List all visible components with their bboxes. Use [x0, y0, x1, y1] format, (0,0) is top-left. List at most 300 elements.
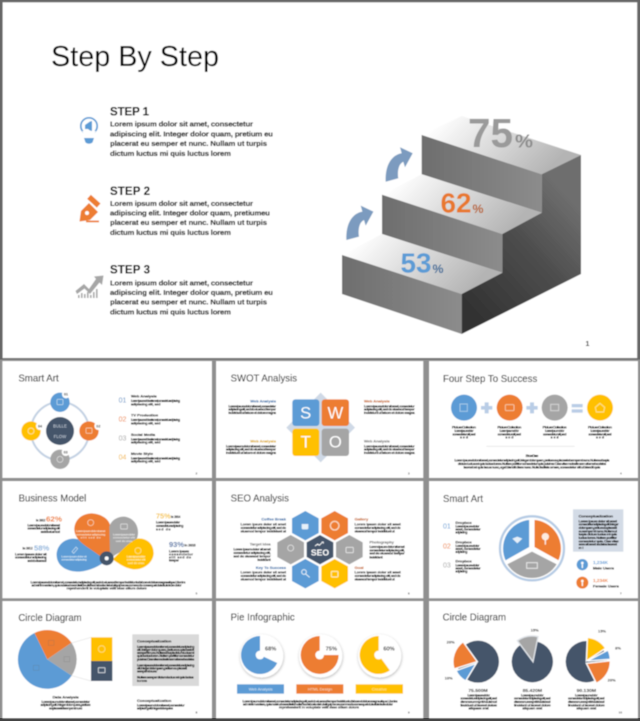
pie: 90.130M: 15% — [598, 628, 606, 633]
list of four items: Web Analysis — [131, 394, 157, 399]
conceptualization box: mi — [579, 546, 583, 550]
panel: main slide Step By Step — [2, 2, 637, 358]
caption: 85.420M: consectetur adipiscing elit, sed — [514, 697, 551, 701]
petal diagram: sed do eius — [116, 539, 133, 543]
captions: consectetur elit, sed — [588, 432, 612, 436]
title: SEO Analysis — [231, 493, 289, 504]
hexagon cluster: SEO — [311, 547, 329, 557]
conceptualization box: consectetur adipiscing elit. Integer — [579, 523, 619, 527]
text: Coffee Break — [241, 517, 287, 533]
numbered list: amet, consectetur — [455, 547, 481, 551]
text: Gallery: eiusmod tempor incididunt ut — [355, 529, 395, 533]
slide background — [2, 361, 212, 478]
stat: 93% in 2015 — [169, 540, 196, 562]
text: Target Idea: Target Idea — [250, 542, 271, 547]
captions: Picture Collection — [543, 424, 567, 429]
caption: Conceptualization: Lorem ipsum dolor sit amet, consectetur — [137, 703, 185, 707]
numbered list: amet, consectetur — [455, 528, 481, 532]
icon: light bulb — [81, 118, 97, 144]
numbered list: Lorem ipsum dolor — [455, 525, 480, 529]
conceptualization box: semper et nunc. Nullam ut turpis dictum luctus mi — [137, 651, 194, 655]
text: Photography: consectetur adipiscing elit, — [369, 548, 405, 552]
numbered list: adipiscing — [455, 531, 467, 535]
stat: 93% in 2015: consectetur — [169, 552, 194, 556]
chart: 3D staircase — [342, 116, 581, 334]
title: Four Step To Success — [443, 374, 537, 385]
pie: 75.500M — [445, 640, 499, 683]
description text: reprehenderit in voluptate velit esse cillum dolore — [67, 587, 147, 591]
cycle diagram: FLOW — [54, 434, 67, 439]
pie: 90.130M — [566, 628, 621, 683]
caption: 75.500M — [460, 688, 497, 711]
text block: opportunities: Lorem ipsum dolor sit amet, consectetur — [364, 444, 415, 448]
text: Gallery: Gallery — [355, 517, 369, 522]
list of four items: TV Production — [131, 413, 159, 418]
middle step — [382, 174, 542, 234]
text: Target Idea: incididunt — [257, 558, 271, 562]
text: Gallery: consectetur adipiscing elit, sed do — [355, 526, 401, 530]
cycle diagram: 01 — [64, 393, 68, 397]
captions: sed — [596, 436, 604, 440]
conceptualization box: sem sit amet sodales laoreet — [579, 543, 618, 547]
panel: Circle Diagram pie with boxes — [2, 601, 212, 718]
label: 62%: 62 — [440, 188, 472, 218]
arrow: upper curved arrow — [386, 147, 413, 182]
panel: SEO Analysis — [216, 481, 423, 598]
captions: sed — [551, 436, 559, 440]
pie chart — [18, 630, 77, 689]
caption: 90.130M: aliquam erat — [576, 707, 597, 711]
equation of four circles — [451, 395, 613, 421]
pie: 75%: 75% — [326, 647, 337, 653]
list of four items: 03 — [119, 436, 127, 443]
numbered list: Lorem ipsum dolor — [455, 563, 480, 567]
pie: 60%: 60% — [383, 647, 395, 653]
caption: 85.420M — [514, 688, 551, 711]
conceptualization box: quis luctus lorem. Nullam porttitor consectetur — [137, 654, 195, 658]
stat: 58% in 2012: In 2012 — [23, 546, 33, 551]
pie: 90.130M: 8% — [615, 646, 621, 651]
panel: Pie Infographic — [216, 601, 423, 718]
numbered list: 03 — [443, 563, 451, 570]
numbered list: adipiscing — [455, 550, 467, 554]
dark side of staircase — [462, 155, 581, 334]
panel: Four Step To Success — [429, 361, 638, 478]
label: 75%: % — [515, 132, 533, 152]
caption: 90.130M: Lorem ipsum dolor — [575, 693, 598, 697]
text block: opportunities: incididunt ut labore et dolore magna — [364, 451, 415, 455]
text block: step 2: Lorem ipsum dolor sit amet, consectetur — [110, 199, 253, 208]
caption: 85.420M: aliquam erat — [522, 707, 543, 711]
text block: step 1: STEP 1 — [110, 106, 150, 118]
stat: 58% in 2012 — [15, 543, 50, 563]
petal diagram: Lorem ipsum dolor — [113, 532, 136, 536]
stat: female users: 1,234K — [593, 578, 609, 583]
text: Coffee Break: eiusmod tempor incididunt ut — [241, 529, 287, 533]
caption: 85.420M: Lorem ipsum dolor — [521, 693, 544, 697]
page number: 5 — [196, 592, 198, 596]
petal diagram: consectetur elit — [113, 536, 135, 540]
text: Goal: eiusmod tempor incididunt ut — [355, 577, 395, 581]
label: 62%: % — [472, 202, 484, 216]
numbered list — [443, 520, 481, 573]
text block: weaknesses: adipiscing elit, sed do eiusmod tempor — [364, 408, 415, 412]
text block: strengths: incididunt ut labore et dolore magna — [228, 411, 276, 415]
pie: 85.420M: 15% — [531, 627, 539, 632]
stat: 62% in 2012: In 2012 — [36, 517, 46, 522]
caption: 90.130M — [568, 688, 605, 711]
caption: 90.130M: consectetur adipiscing elit, sed — [568, 697, 605, 701]
stat: female users: Female Users — [593, 584, 620, 589]
caption: Conceptualization: Conceptualization — [137, 698, 172, 703]
label: Web Analysis: Web Analysis — [249, 687, 273, 692]
text block: step 3 — [110, 264, 273, 316]
list of four items — [119, 394, 180, 464]
hexagon cluster — [277, 511, 363, 588]
captions: Lorem ipsum dolor — [545, 429, 565, 433]
pie: 68%: 68% — [265, 647, 276, 653]
numbered list: Dropbox — [455, 539, 472, 544]
title: Circle Diagram — [18, 613, 82, 624]
pie: 60% — [358, 634, 401, 678]
text block: threats: Lorem ipsum dolor sit amet, consectetur — [226, 444, 277, 448]
stat: 93% in 2015: elit sed do — [169, 555, 191, 559]
petal diagram: elit sed do — [81, 536, 101, 540]
stat: 93% in 2015: tempor — [169, 558, 180, 562]
text: Target Idea — [233, 542, 271, 562]
list of four items: adipiscing elit, sed — [131, 441, 160, 445]
title: Step By Step — [51, 41, 219, 73]
text block: step 2: STEP 2 — [110, 186, 150, 198]
slide background — [216, 481, 423, 598]
pie: 90.130M: 20% — [608, 677, 616, 682]
captions — [452, 424, 613, 440]
text block: weaknesses: Web Analysis — [364, 399, 390, 404]
caption: 75.500M: tincidunt ut laoreet dolore — [460, 703, 497, 707]
slide background — [2, 601, 212, 718]
page number: 3 — [408, 472, 410, 476]
text block: step 3: STEP 3 — [110, 264, 150, 276]
petal diagram: Lorem ipsum dolor — [127, 554, 146, 558]
page number: 4 — [620, 472, 622, 476]
description text — [31, 581, 185, 591]
stat: 58% in 2012: sed do eiusmod — [27, 559, 47, 563]
title: Business Model — [19, 494, 86, 505]
captions: sed — [505, 436, 513, 440]
divider line — [486, 445, 575, 447]
caption: 75.500M: consectetur adipiscing elit, sed — [460, 697, 497, 701]
text: Goal: Goal — [355, 565, 364, 570]
text: Photography: Photography — [369, 539, 395, 544]
bottom frame edge — [0, 718, 640, 721]
conceptualization box: Conceptualization — [137, 638, 172, 643]
stat: male users: Male Users — [593, 565, 615, 570]
list of four items: Lorem ipsum dolor sit amet, consectetur adipiscing — [131, 437, 180, 441]
label: Creative — [356, 684, 403, 694]
conceptualization box: Lorem ipsum dolor sit amet, consectetur adipiscing — [137, 645, 194, 649]
conceptualization box: luctus lorem. Nullam porttitor — [579, 536, 618, 540]
caption: 75.500M: 75.500M — [468, 688, 488, 694]
connector lines — [71, 637, 91, 681]
text block: step 2: placerat eu semper et nunc. Nullam ut turpis — [110, 218, 267, 227]
SWOT diagram: T — [301, 433, 311, 452]
stat: 62% in 2012: 62% — [46, 515, 62, 524]
text block: strengths: Lorem ipsum dolor sit amet, consectetur — [228, 404, 277, 408]
top step — [422, 116, 581, 174]
numbered list: 02 — [443, 543, 451, 550]
navy box with icon — [91, 661, 112, 681]
description text: reprehenderit in voluptate velit esse cillum dolore — [279, 706, 359, 710]
description text: ad minim veniam, quis nostrud exercitation ullamco laboris nisi ut aliquip ex ea commodo consequat duis aute irure dolor — [32, 584, 182, 588]
stat: male users — [577, 559, 615, 570]
captions: consectetur elit, sed — [498, 432, 521, 436]
text: Coffee Break: Lorem ipsum dolor sit amet — [241, 523, 287, 527]
description text — [242, 699, 397, 710]
text block: threats: incididunt ut labore et dolore magna — [226, 451, 276, 455]
title: Smart Art — [443, 494, 483, 505]
caption: Conceptualization — [137, 698, 185, 711]
text: Photography: Lorem ipsum dolor sit amet — [369, 545, 405, 549]
text block: threats: Web Analysis — [250, 439, 277, 444]
text: Photography — [369, 539, 405, 559]
page number: 2 — [196, 472, 198, 476]
text: Gallery — [355, 517, 401, 533]
stat: 62% in 2012: Lorem ipsum dolor sit amet — [27, 523, 61, 527]
stat: 58% in 2012: consectetur adipiscing — [15, 556, 47, 560]
arrow: lower curved arrow — [346, 206, 373, 240]
bottom riser — [342, 255, 462, 334]
bottom step — [342, 234, 502, 294]
text block: weaknesses: Lorem ipsum dolor sit amet, consectetur — [364, 404, 415, 408]
caption: Data Analysis: Lorem ipsum dolor sit amet, consectetur — [41, 700, 90, 704]
captions: Picture Collection — [452, 424, 477, 429]
text block: step 1: dictum luctus mi quis luctus lorem — [110, 149, 231, 158]
slide background — [429, 361, 638, 478]
numbered list: Dropbox — [455, 559, 472, 564]
page number: 8 — [196, 711, 198, 715]
caption: 75.500M: Lorem ipsum dolor — [467, 693, 491, 697]
list of four items: 04 — [119, 455, 127, 462]
text: Photography: sed do eiusmod tempor — [369, 552, 405, 556]
caption: 90.130M: 90.130M — [577, 688, 596, 694]
list of four items: Movie Style — [131, 451, 154, 456]
main slide background — [2, 2, 637, 358]
text block: step 2 — [110, 186, 270, 237]
conceptualization box: Conceptualization — [579, 513, 614, 518]
text: Key To Success: eiusmod tempor incididunt ut — [241, 577, 287, 581]
stat: 75% in 2014: consectetur adipiscing — [156, 524, 183, 528]
caption: Data Analysis: Data Analysis — [53, 695, 79, 700]
SWOT diagram — [286, 393, 355, 462]
page number: 9 — [408, 711, 410, 715]
main slide frame — [0, 0, 640, 360]
show case text: Show Case — [526, 453, 539, 458]
text block: step 2: adipiscing elit. Integer dolor quam, pretiumeu — [110, 208, 270, 218]
yellow box with icon — [91, 637, 112, 661]
captions: Lorem ipsum dolor — [590, 429, 610, 433]
caption: Data Analysis: adipiscing elit. Integer dolor quam, pretium — [41, 703, 91, 707]
stat: female users — [576, 577, 620, 589]
caption: 75.500M: diam nonummy nibh euismod — [460, 700, 497, 704]
numbered list: 01 — [443, 524, 451, 531]
text block: step 3: Lorem ipsum dolor sit amet, consectetur — [110, 278, 253, 287]
text: Coffee Break: consectetur adipiscing elit, sed do — [241, 526, 286, 530]
icon: rising chart arrow — [76, 276, 104, 298]
title: Smart Art — [18, 373, 59, 384]
slide background — [216, 361, 423, 478]
text: Gallery: Lorem ipsum dolor sit amet — [355, 523, 401, 527]
description text: ad minim veniam, quis nostrud exercitation ullamco laboris nisi ut aliquip ex ea commodo consequat duis aute irure dolor — [243, 702, 394, 706]
caption: Conceptualization: adipiscing elit. Integer dolor quam — [137, 707, 173, 711]
label: 75%: 75 — [468, 110, 513, 156]
text: Coffee Break: Coffee Break — [261, 517, 287, 522]
petal diagram — [57, 513, 154, 572]
label: 53%: % — [432, 262, 444, 276]
text: Photography: incididunt — [369, 555, 383, 559]
title: SWOT Analysis — [231, 373, 297, 384]
list of four items: Lorem ipsum dolor sit amet, consectetur adipiscing — [131, 456, 180, 460]
text block: threats: adipiscing elit, sed do eiusmod tempor — [226, 448, 277, 452]
show case text: Lorem ipsum dolor sit amet, consectetur adipiscing elit. Integer dolor quam, pretium eu placerat et semper et nunc. Nullam ut turpis — [454, 459, 610, 463]
numbered list: adipiscing — [455, 569, 467, 573]
stat: 58% in 2012: 58% — [34, 543, 50, 552]
conceptualization box — [132, 634, 199, 686]
SWOT diagram: W — [327, 403, 343, 422]
page number: 10 — [619, 710, 622, 714]
text block: step 3: dictum luctus mi quis luctus lorem — [110, 307, 231, 316]
conceptualization box: semper et nunc — [137, 670, 157, 674]
captions: sed — [460, 436, 468, 440]
text block: weaknesses: incididunt ut labore et dolore magna — [364, 411, 415, 415]
text: Key To Success — [241, 565, 287, 581]
show case text — [454, 453, 610, 469]
pie: 75% — [299, 634, 342, 678]
text block: threats — [226, 439, 277, 455]
numbered list: Lorem ipsum dolor — [455, 544, 480, 548]
stat: 75% in 2014: In 2014 — [171, 514, 181, 519]
petal diagram: sed do eius — [128, 561, 145, 565]
list of four items: 02 — [119, 417, 127, 424]
cycle diagram — [21, 390, 102, 469]
text: Target Idea: consectetur adipiscing elit, — [233, 551, 271, 555]
slide background — [216, 601, 423, 718]
page number: 7 — [620, 592, 622, 596]
text block: opportunities — [364, 439, 415, 455]
list of four items: Social Media — [131, 432, 156, 437]
label: Web Analysis — [237, 684, 284, 694]
stat: male users: 1,234K — [593, 560, 609, 565]
list of four items: adipiscing elit, sed — [131, 402, 160, 406]
caption: 90.130M: tincidunt ut laoreet dolore — [568, 703, 605, 707]
cycle diagram: 02 — [96, 424, 100, 428]
text block: step 1: adipiscing elit. Integer dolor quam, pretium eu — [110, 129, 273, 138]
label: HTML Design — [296, 684, 343, 694]
conceptualization box: Lorem ipsum dolor sit amet, consectetur adipiscing — [137, 664, 194, 668]
text block: step 3: placerat eu semper et nunc. Nullam ut turpis — [110, 298, 267, 307]
text block: step 3: adipiscing elit. Integer dolor quam, pretium eu — [110, 288, 273, 297]
petal diagram: consectetur adipiscing — [76, 532, 106, 536]
stat: 58% in 2012: Lorem ipsum dolor sit — [15, 552, 47, 556]
show case text: laoreet mi quis lacus nunc, eget blandit diam nunc. Nulla facilisis ornare, consectetur elit ut blandit quis — [464, 465, 600, 469]
text block: step 1: placerat eu semper et nunc. Nullam ut turpis — [110, 139, 267, 148]
cycle diagram: 04 — [38, 424, 43, 428]
title: Circle Diagram — [443, 613, 506, 624]
pie: 75.500M: 10% — [445, 676, 453, 681]
stat: 75% in 2014: 75% — [156, 511, 171, 520]
conceptualization box: eu semper et nunc. Nullam ut — [579, 529, 618, 533]
caption: 90.130M: diam nonummy nibh euismod — [568, 700, 605, 704]
list of four items: 01 — [119, 398, 127, 405]
text block: step 2: dictum luctus mi quis luctus lorem — [110, 228, 231, 237]
stat: 62% in 2012 — [27, 515, 62, 534]
text: Key To Success: consectetur adipiscing elit, sed do — [241, 574, 286, 578]
SWOT diagram: O — [329, 433, 342, 452]
petal diagram: consectetur adipiscing — [61, 558, 87, 562]
text block: strengths — [228, 399, 277, 415]
text block: opportunities: adipiscing elit, sed do eiusmod tempor — [364, 448, 415, 452]
caption: 75.500M: aliquam erat — [469, 707, 489, 711]
label: 53%: 53 — [400, 248, 432, 278]
text block: strengths: adipiscing elit, sed do eiusmod tempor — [228, 408, 277, 412]
top riser — [422, 135, 542, 213]
conceptualization box: pulvinar. Cras vitae molestie sem sit amet sodales — [137, 657, 194, 661]
conceptualization box: Nullam semper dictum luctus mi quis luctus — [137, 676, 194, 680]
show case text: dictum luctus mi quis luctus lorem. Nullam porttitor consectetur quis pulvinar. Cras vitae molestie sem sit amet sodales — [458, 462, 606, 466]
cycle diagram: BULLE — [53, 423, 67, 428]
slide background — [429, 481, 638, 598]
panel: Smart Art cycle — [2, 361, 212, 478]
stat: 75% in 2014 — [156, 511, 183, 531]
stat: 62% in 2012: sed do eiusmod — [41, 530, 60, 534]
slide background — [429, 601, 638, 718]
title: Pie Infographic — [231, 613, 295, 624]
list of four items: Lorem ipsum dolor sit amet, consectetur adipiscing — [131, 399, 180, 403]
conceptualization box: dolor quam, pretium eu placerat — [579, 526, 618, 530]
panel: Business Model — [2, 481, 212, 598]
text: Target Idea: sed do eiusmod tempor — [233, 554, 271, 558]
pie: 68% — [240, 634, 283, 678]
middle riser — [382, 195, 502, 273]
text: Key To Success: Lorem ipsum dolor sit amet — [241, 571, 287, 575]
SWOT diagram: S — [300, 403, 311, 422]
conceptualization box: consectetur quis. Cras vitae — [579, 539, 619, 543]
page number: 1 — [586, 341, 590, 348]
text: Key To Success: Key To Success — [256, 565, 287, 570]
captions: consectetur elit, sed — [543, 432, 566, 436]
conceptualization box: turpis dictum luctus mi quis — [579, 533, 617, 537]
text block: step 1 — [110, 106, 273, 158]
page number: 6 — [408, 592, 410, 596]
stat: 93% in 2015: Lorem ipsum — [169, 549, 189, 553]
captions: Lorem ipsum dolor — [454, 429, 474, 433]
caption: Data Analysis — [41, 695, 91, 710]
stat: 75% in 2014: Lorem ipsum dolor — [156, 521, 181, 525]
panel: SWOT Analysis — [216, 361, 423, 478]
petal diagram: consectetur elit — [127, 558, 145, 562]
panel: Circle Diagram three pies — [429, 601, 638, 718]
pie chart — [500, 516, 564, 580]
caption: Data Analysis: eu placerat et semper et nunc — [49, 706, 82, 710]
cycle diagram: 03 — [64, 450, 68, 454]
captions: Picture Collection — [497, 424, 522, 429]
numbered list: amet, consectetur — [455, 566, 481, 570]
description text: Lorem ipsum dolor sit amet, consectetur adipiscing elit, sed do eiusmod tempor incididunt ut labore et dolore magna aliqua. Ut enim — [242, 699, 397, 703]
caption: 85.420M: diam nonummy nibh euismod — [514, 700, 551, 704]
conceptualization box: Lorem ipsum dolor sit amet — [579, 519, 618, 523]
stat: 93% in 2015: 93% — [169, 540, 184, 549]
stat: 75% in 2014: sed do — [156, 527, 171, 531]
text block: weaknesses — [364, 399, 415, 415]
